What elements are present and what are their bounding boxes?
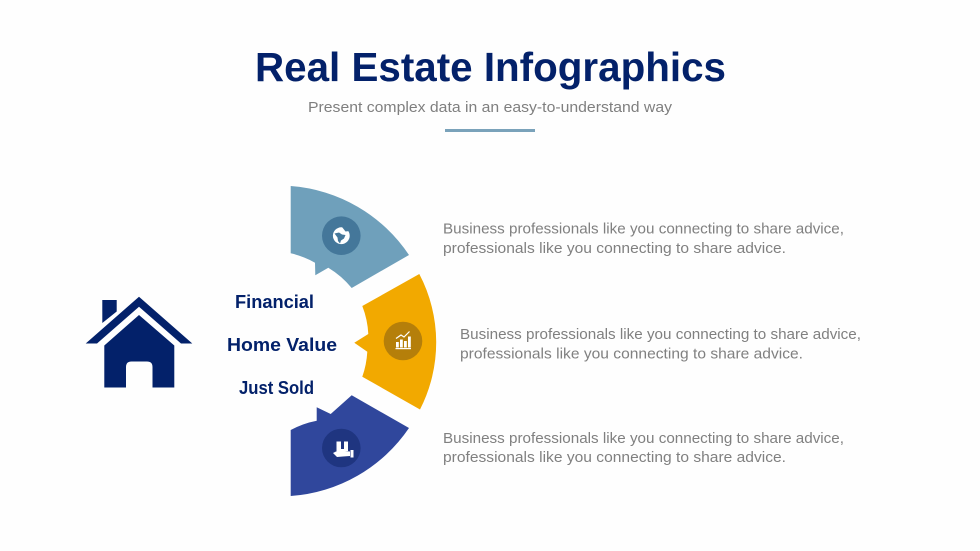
label: Home Value: Home Value [227,335,337,355]
category labels [227,292,337,398]
text block: bottom: Business professionals like you connecting to share advice, [443,431,844,447]
title underline [445,129,535,132]
text block: top: professionals like you connecting to share advice. [443,241,786,257]
segment: bottom blue [291,395,409,496]
text block: middle [460,327,861,362]
text block: top: Business professionals like you connecting to share advice, [443,222,844,238]
icon: globe [322,216,361,255]
text block: top [443,222,844,257]
segment: top blue-grey [291,186,409,288]
icon: house [86,297,192,388]
subtitle: Present complex data in an easy-to-understand way [308,99,673,116]
segment: middle yellow [354,274,436,410]
text block: bottom [443,431,844,466]
title: Real Estate Infographics [255,44,726,90]
label: Just Sold: Just Sold [239,378,314,398]
text block: middle: Business professionals like you connecting to share advice, [460,327,861,343]
label: Financial: Financial [235,292,314,312]
icon: growth chart [384,322,422,360]
text block: bottom: professionals like you connecting to share advice. [443,450,786,466]
text block: middle: professionals like you connecting to share advice. [460,346,803,362]
icon: hand with boxes [322,429,361,467]
